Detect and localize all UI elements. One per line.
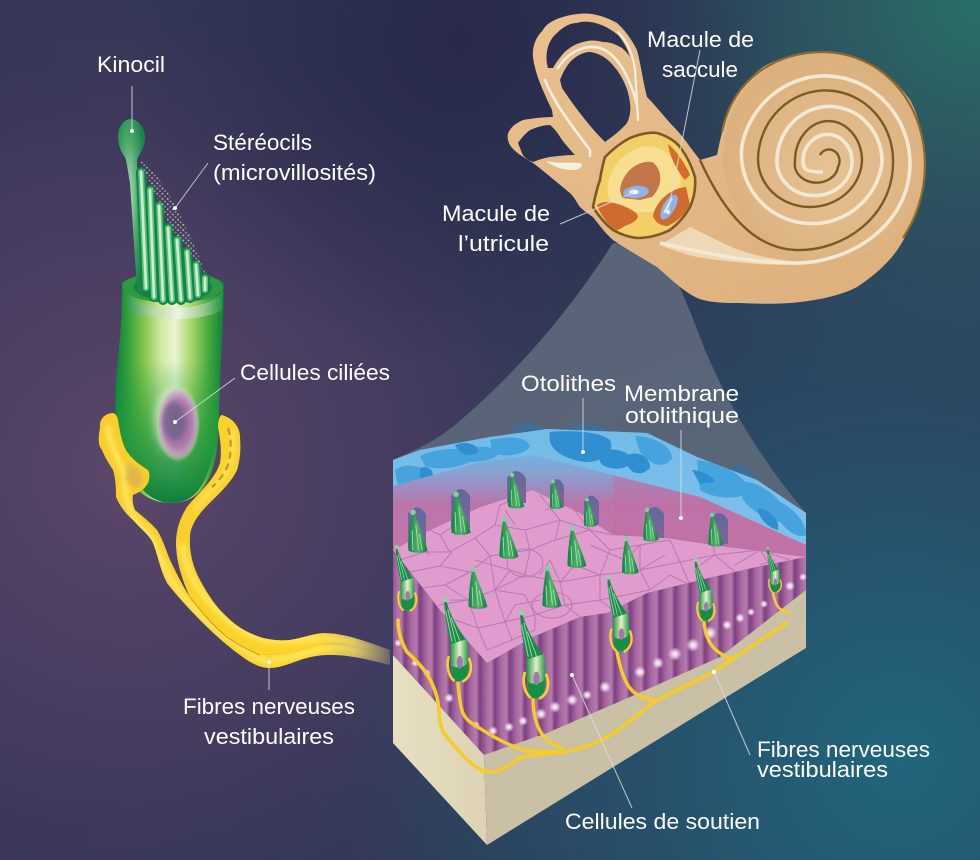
label: Macule de saccule: saccule (662, 57, 738, 82)
label: Fibres nerveuses vestibulaires left (183, 660, 355, 749)
nucleus (154, 386, 194, 454)
hair cell illustration (95, 119, 395, 675)
labyrinth body (508, 13, 925, 304)
nerve fibres in block (398, 592, 790, 772)
label: Kinocil (97, 52, 165, 133)
inner ear: labyrinth and cochlea (508, 13, 925, 304)
label: Membrane otolithique (624, 381, 739, 520)
white spiral (660, 76, 910, 263)
translucent zoom cone from vestibule to block (393, 243, 806, 513)
macula tissue block (393, 424, 807, 845)
cochlea disc (723, 52, 925, 262)
left fibre (95, 405, 395, 675)
vestibule section (593, 133, 695, 238)
right fibre (176, 415, 390, 656)
label: Fibres nerveuses vestibulaires left: vestibulaires (204, 724, 334, 749)
label: Macule de l'utricule: Macule de (442, 201, 550, 226)
label: Cellules de soutien: Cellules de soutien (565, 809, 760, 834)
cell body (115, 273, 224, 503)
label: Cellules ciliées (173, 360, 390, 424)
label: Fibres nerveuses vestibulaires left: Fibres nerveuses (183, 694, 355, 719)
stereocilia (141, 172, 205, 300)
utricular macula (620, 162, 660, 200)
label: Macule de l'utricule: l’utricule (458, 231, 549, 256)
hair bundles in wells (408, 473, 724, 553)
hair cells in wall (395, 545, 781, 699)
kinocilium head and stem (118, 119, 145, 292)
pink epithelium floor (393, 490, 806, 663)
label: Otolithes (521, 371, 616, 454)
stereocilia granules (140, 160, 208, 280)
label: Kinocil: Kinocil (97, 52, 165, 77)
saccular macula (657, 192, 681, 222)
label: Stéréocils (173, 130, 376, 210)
otolithic membrane back walls (393, 429, 806, 557)
label: Cellules ciliées: Cellules ciliées (240, 360, 390, 385)
support cell wall left (393, 550, 487, 755)
brown spiral (700, 90, 893, 250)
cochlea outline arc (722, 52, 925, 238)
label: Cellules de soutien (565, 673, 760, 834)
support cell nuclei glows (394, 573, 807, 736)
label: Macule de saccule (647, 27, 754, 214)
white canal highlights (558, 47, 637, 105)
label: Fibres nerveuses vestibulaires right: Fibres nerveuses (757, 737, 930, 762)
otoliths top layer (393, 424, 806, 545)
label: Macule de l'utricule (442, 190, 637, 256)
label: Otolithes: Otolithes (521, 371, 616, 396)
rim opening (123, 271, 223, 303)
arched wells in membrane (408, 471, 728, 548)
label: Stéréocils: (microvillosités) (213, 160, 376, 185)
support cell wall right (484, 557, 806, 755)
label: Membrane otolithique: otolithique (625, 403, 739, 428)
label: Fibres nerveuses vestibulaires right: vestibulaires (757, 757, 888, 782)
label: Membrane otolithique: Membrane (624, 381, 739, 406)
vestibular nerve fibres (95, 405, 395, 675)
base right face (484, 590, 806, 845)
hair bundles on floor (468, 517, 639, 609)
label: Fibres nerveuses vestibulaires right (712, 670, 930, 782)
label: Macule de saccule: Macule de (647, 27, 754, 52)
light band (660, 227, 823, 265)
base left face (393, 655, 487, 845)
label: Stéréocils: Stéréocils (213, 130, 312, 155)
